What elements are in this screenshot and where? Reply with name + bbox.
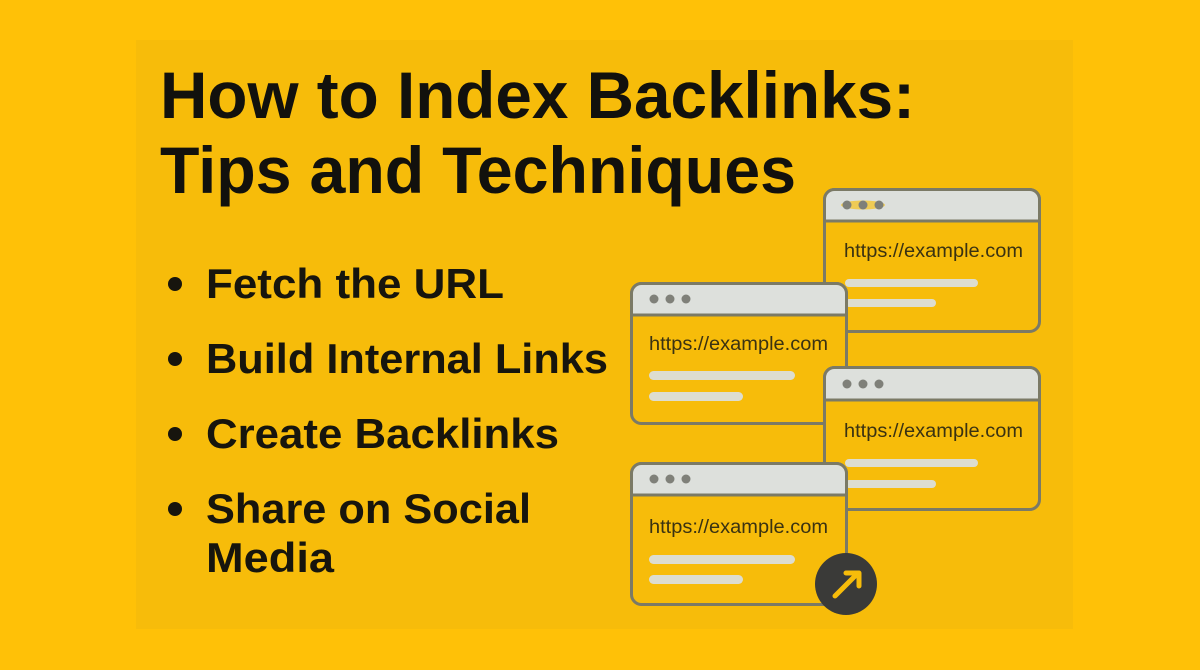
bullet: Share on Social Media: Media bbox=[206, 534, 335, 581]
bullet: Share on Social Media: Share on Social bbox=[206, 485, 531, 532]
title bbox=[160, 58, 915, 207]
bullet: Create Backlinks: Create Backlinks bbox=[206, 410, 559, 457]
bullet: Fetch the URL: Fetch the URL bbox=[206, 260, 504, 307]
browser window: bottom left: https://example.com bbox=[649, 517, 828, 538]
browser window: bottom left bbox=[632, 464, 846, 604]
bullet: Share on Social Media bbox=[168, 485, 531, 581]
title: Tips and Techniques bbox=[160, 133, 796, 207]
browser window: middle left: https://example.com bbox=[649, 334, 828, 355]
browser window: middle left bbox=[632, 284, 846, 424]
icon: arrow badge bbox=[815, 553, 877, 615]
bullet list bbox=[168, 260, 608, 581]
browser window: middle right bbox=[824, 368, 1040, 510]
browser window: top right bbox=[824, 190, 1040, 332]
browser window: top right: https://example.com bbox=[844, 241, 1023, 262]
browser window: middle right: https://example.com bbox=[844, 421, 1023, 442]
bullet: Build Internal Links: Build Internal Links bbox=[206, 335, 608, 382]
background panel bbox=[136, 40, 1073, 629]
title: How to Index Backlinks: bbox=[160, 58, 915, 132]
